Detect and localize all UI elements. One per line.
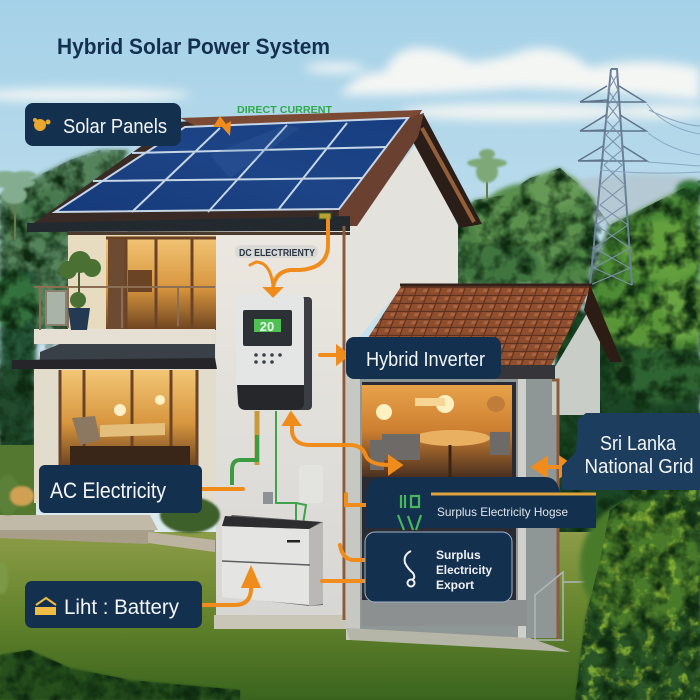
lower left window xyxy=(60,370,197,466)
battery charge arrow xyxy=(198,570,258,605)
gable soffit xyxy=(412,113,482,228)
lawn xyxy=(0,532,700,700)
porch roof xyxy=(12,344,217,369)
potted plant xyxy=(59,251,101,330)
label: surplus electricity export: Electricity xyxy=(436,563,492,577)
lower roof tiles xyxy=(346,285,592,372)
icon: surplus indicator xyxy=(398,495,421,530)
clouds xyxy=(0,48,700,121)
label: national grid xyxy=(562,413,700,490)
battery xyxy=(222,515,323,606)
plinth xyxy=(214,615,349,629)
barge board xyxy=(338,113,424,226)
orange flow arrows xyxy=(179,116,573,605)
background trees xyxy=(0,150,700,640)
label: surplus electricity house: Surplus Electricity Hogse xyxy=(437,505,568,519)
wing with lower roof xyxy=(344,226,622,652)
palm trees xyxy=(0,149,507,240)
label: solar panels xyxy=(25,103,181,146)
panel array xyxy=(55,118,408,212)
lower left wall xyxy=(34,368,218,503)
label: DC electricity: DC ELECTRIENTY xyxy=(239,248,315,259)
downspout xyxy=(344,226,558,640)
balcony door window xyxy=(106,236,216,330)
inverter to room arrow xyxy=(285,414,400,472)
pendant lights xyxy=(376,395,505,420)
wing wall xyxy=(346,370,558,638)
balcony xyxy=(34,236,216,344)
icon: plug xyxy=(405,551,414,586)
roof with solar panels xyxy=(27,110,482,235)
label: AC electricity xyxy=(39,465,202,513)
distant mountains xyxy=(570,174,700,225)
wing room window xyxy=(362,382,516,602)
label: national grid: National Grid xyxy=(584,456,694,478)
label: surplus electricity export: Surplus xyxy=(436,548,481,562)
label: DC electricity xyxy=(235,245,318,259)
main wall xyxy=(216,226,348,628)
gable wall xyxy=(345,143,458,350)
right foreground bush xyxy=(575,465,700,700)
dining table xyxy=(370,430,510,477)
grid double arrow xyxy=(534,459,573,475)
railing by steps xyxy=(535,572,592,640)
eave band xyxy=(27,216,350,232)
label: hybrid inverter: Hybrid Inverter xyxy=(366,349,485,371)
inverter buttons xyxy=(254,353,282,364)
inverter display: 20 xyxy=(260,319,274,334)
icon: sun xyxy=(33,118,50,131)
upper wall xyxy=(68,230,218,335)
label: surplus electricity export xyxy=(365,532,512,602)
label: surplus electricity export: Export xyxy=(436,578,474,592)
icon: battery xyxy=(35,598,56,615)
label: AC electricity: AC Electricity xyxy=(50,478,166,503)
label: battery xyxy=(25,581,202,628)
label: direct current: DIRECT CURRENT xyxy=(237,105,332,116)
title: Hybrid Solar Power System xyxy=(57,34,330,59)
label: hybrid inverter xyxy=(346,337,501,379)
flower shrub xyxy=(0,475,34,515)
bottom left foliage xyxy=(0,562,240,700)
label: solar panels: Solar Panels xyxy=(63,116,167,138)
hybrid inverter xyxy=(236,295,312,410)
AC electricity arrow xyxy=(179,481,243,497)
green conduits and junction box xyxy=(232,411,323,524)
panel arrow xyxy=(213,116,231,136)
label: national grid: Sri Lanka xyxy=(600,433,677,455)
floor slab xyxy=(34,329,215,344)
roof surface xyxy=(27,110,422,228)
shrub by steps xyxy=(160,497,220,533)
inverter to label arrow xyxy=(320,348,347,362)
porch steps xyxy=(0,515,158,530)
label: surplus electricity house xyxy=(366,477,596,530)
export arrows xyxy=(322,494,398,590)
transmission tower xyxy=(578,69,700,285)
side gable xyxy=(552,305,600,415)
label: battery: Liht : Battery xyxy=(64,596,179,619)
junction box xyxy=(319,213,331,219)
path gravel xyxy=(346,628,570,652)
DC electricity line xyxy=(250,220,328,295)
main house xyxy=(0,143,458,629)
railing xyxy=(34,287,215,330)
